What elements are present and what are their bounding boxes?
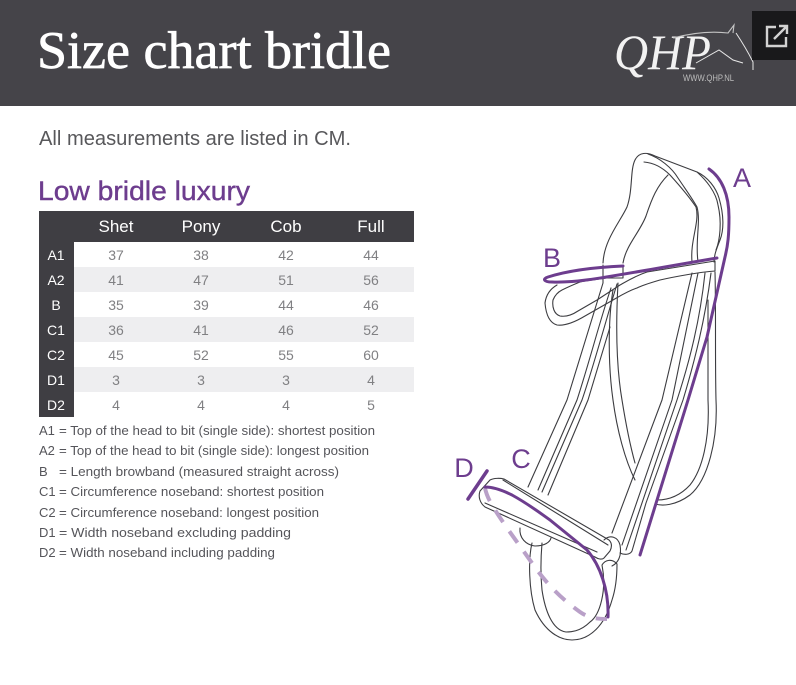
row C2: C2 — [47, 347, 65, 363]
row A1 — [47, 247, 379, 263]
legend: = Width noseband including padding — [59, 545, 275, 560]
row A2 — [47, 272, 379, 288]
legend: = Length browband (measured straight across) — [59, 464, 339, 479]
nose strap — [530, 543, 617, 640]
table heading: Low bridle luxury — [38, 176, 251, 206]
title: Size chart bridle — [37, 22, 391, 80]
measure line A — [640, 169, 729, 555]
row D2: 4 — [112, 397, 120, 413]
noseband — [479, 478, 611, 559]
row B: 39 — [193, 297, 209, 313]
row C1 — [47, 322, 379, 338]
measure line C dashed back — [485, 488, 607, 619]
row C2 — [47, 347, 379, 363]
row A2: 56 — [363, 272, 379, 288]
legend — [39, 423, 375, 560]
row C1: 36 — [108, 322, 124, 338]
row A1: 38 — [193, 247, 209, 263]
row A2: 47 — [193, 272, 209, 288]
label B: B — [543, 243, 561, 273]
row C1: C1 — [47, 322, 65, 338]
right cheek straps — [612, 273, 692, 533]
row C2: 60 — [363, 347, 379, 363]
legend: = Circumference noseband: longest position — [59, 505, 319, 520]
row D2 — [47, 397, 375, 413]
row D2: 5 — [367, 397, 375, 413]
throat strap — [609, 290, 635, 480]
measure line B — [545, 258, 717, 282]
table header row: Cob — [270, 217, 302, 236]
label A: A — [733, 163, 751, 193]
icon: external link button — [752, 11, 796, 60]
header banner — [0, 0, 796, 106]
measure line C — [485, 487, 608, 617]
row B — [51, 297, 379, 313]
legend: C2 — [39, 505, 56, 520]
row D1: 3 — [112, 372, 120, 388]
row B: B — [51, 297, 61, 313]
measure line D — [468, 471, 487, 499]
table header row: Shet — [99, 217, 134, 236]
row C2: 52 — [193, 347, 209, 363]
intro text: All measurements are listed in CM. — [39, 128, 351, 150]
legend: D1 — [39, 525, 56, 540]
browband — [545, 261, 715, 325]
row D1 — [47, 372, 375, 388]
row C2: 45 — [108, 347, 124, 363]
row A1: A1 — [47, 247, 65, 263]
row A1: 37 — [108, 247, 124, 263]
legend: = Top of the head to bit (single side): shortest position — [59, 423, 375, 438]
row C2: 55 — [278, 347, 294, 363]
rings — [520, 528, 551, 546]
row C1: 52 — [363, 322, 379, 338]
row D2: D2 — [47, 397, 65, 413]
row C1: 41 — [193, 322, 209, 338]
legend: B — [39, 464, 48, 479]
left cheek straps — [528, 283, 603, 487]
logo: QHP: WWW.QHP.NL — [683, 73, 734, 83]
row A2: A2 — [47, 272, 65, 288]
row D2: 4 — [282, 397, 290, 413]
crown — [603, 153, 723, 263]
table header row — [99, 217, 385, 236]
legend: C1 — [39, 484, 56, 499]
row D1: 3 — [282, 372, 290, 388]
legend: D2 — [39, 545, 56, 560]
label D: D — [454, 453, 474, 483]
legend: = Width noseband excluding padding — [59, 525, 291, 540]
row B: 44 — [278, 297, 294, 313]
row A1: 42 — [278, 247, 294, 263]
table header row: Full — [357, 217, 385, 236]
bridle line drawing — [479, 153, 723, 640]
size table — [39, 211, 414, 417]
label C: C — [511, 444, 531, 474]
bridle diagram — [454, 153, 751, 640]
row D1: 4 — [367, 372, 375, 388]
legend: = Circumference noseband: shortest position — [59, 484, 324, 499]
row A2: 41 — [108, 272, 124, 288]
row D1: D1 — [47, 372, 65, 388]
row B: 46 — [363, 297, 379, 313]
row D1: 3 — [197, 372, 205, 388]
legend: A2 — [39, 443, 55, 458]
row C1: 46 — [278, 322, 294, 338]
row D2: 4 — [197, 397, 205, 413]
logo: QHP: QHP — [614, 24, 711, 80]
legend: A1 — [39, 423, 55, 438]
row A1: 44 — [363, 247, 379, 263]
right throat loop — [655, 272, 716, 505]
table header row: Pony — [182, 217, 221, 236]
legend: = Top of the head to bit (single side): longest position — [59, 443, 369, 458]
row B: 35 — [108, 297, 124, 313]
row A2: 51 — [278, 272, 294, 288]
